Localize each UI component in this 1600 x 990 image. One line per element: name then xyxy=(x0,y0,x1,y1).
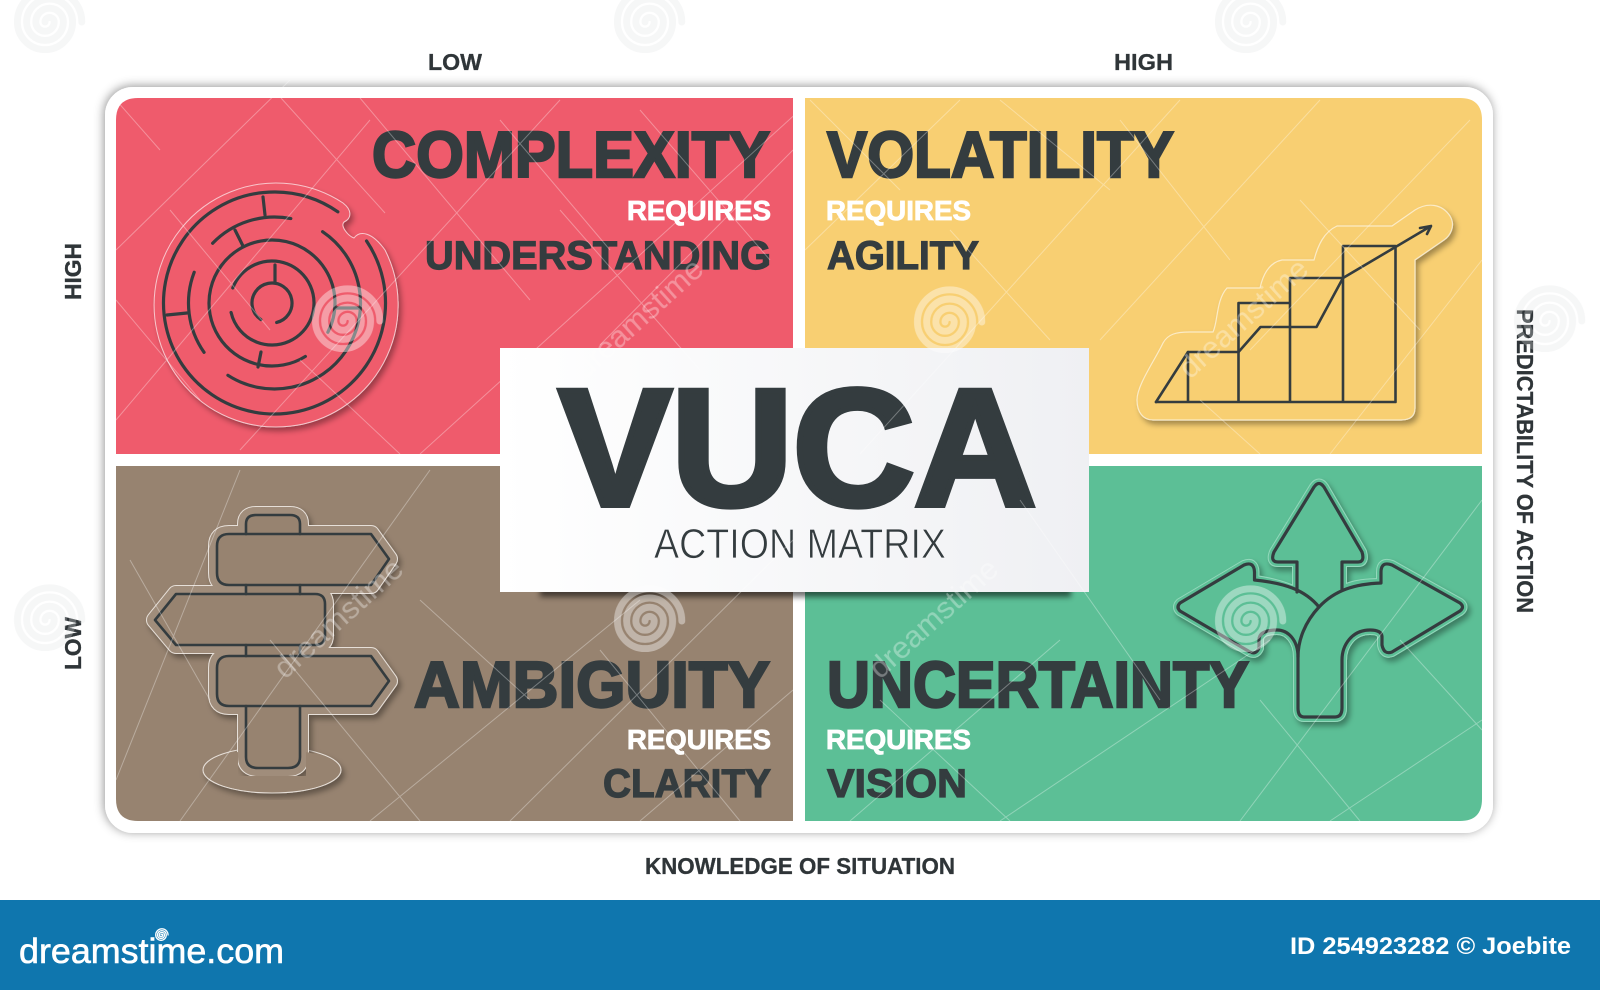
text: requires: REQUIRES xyxy=(627,195,771,226)
VUCA action matrix infographic: dreamstime xyxy=(861,551,1005,685)
text: agility: AGILITY xyxy=(827,234,979,278)
ambiguity background xyxy=(116,466,793,821)
subtitle: action matrix: ACTION MATRIX xyxy=(654,520,946,567)
VUCA action matrix infographic: dreamstime xyxy=(266,551,410,685)
volatility background xyxy=(805,98,1482,454)
VUCA action matrix infographic: dreamstime xyxy=(1171,251,1315,385)
heading: volatility: VOLATILITY xyxy=(827,118,1174,191)
heading: uncertainty: UNCERTAINTY xyxy=(827,648,1249,721)
icon: signpost xyxy=(155,515,389,793)
axis label: left low: LOW xyxy=(60,617,86,670)
footer logo: dreamstime.com: dreamstime.com xyxy=(19,932,284,971)
axis label: left high: HIGH xyxy=(60,243,86,300)
footer band xyxy=(0,900,1600,990)
panel: ambiguity xyxy=(116,466,793,821)
outer white frame xyxy=(105,87,1493,833)
footer logo spiral xyxy=(156,929,168,940)
text: understanding: UNDERSTANDING xyxy=(425,234,771,278)
title: VUCA: VUCA xyxy=(559,356,1036,541)
icon: three-way arrows xyxy=(1178,484,1462,717)
panel: complexity xyxy=(116,98,793,457)
icon: rising bar chart xyxy=(1137,205,1452,420)
text: requires: REQUIRES xyxy=(627,724,771,755)
panel: uncertainty xyxy=(805,466,1482,821)
footer background xyxy=(0,900,1600,990)
VUCA action matrix infographic: dreamstime xyxy=(566,251,710,385)
text: requires: REQUIRES xyxy=(826,724,971,755)
text: requires: REQUIRES xyxy=(826,195,971,226)
heading: complexity: COMPLEXITY xyxy=(372,118,770,191)
footer credit: ID 254923282 © Joebite xyxy=(1290,933,1571,960)
axis label: top low: LOW xyxy=(428,49,482,75)
axis label: knowledge of situation: KNOWLEDGE OF SITUATION xyxy=(645,853,955,879)
axis label: top high: HIGH xyxy=(1114,49,1173,75)
complexity background xyxy=(116,98,793,454)
axis label: predictability of action: PREDICTABILITY OF ACTION xyxy=(1512,309,1538,613)
uncertainty background xyxy=(805,466,1482,821)
icon: maze xyxy=(120,149,429,457)
heading: ambiguity: AMBIGUITY xyxy=(414,648,770,721)
text: vision: VISION xyxy=(827,762,967,806)
center title card xyxy=(500,348,1089,592)
center card shadow xyxy=(540,586,1071,597)
card background xyxy=(500,348,1089,592)
panel: volatility xyxy=(805,98,1482,454)
text: clarity: CLARITY xyxy=(603,762,771,806)
